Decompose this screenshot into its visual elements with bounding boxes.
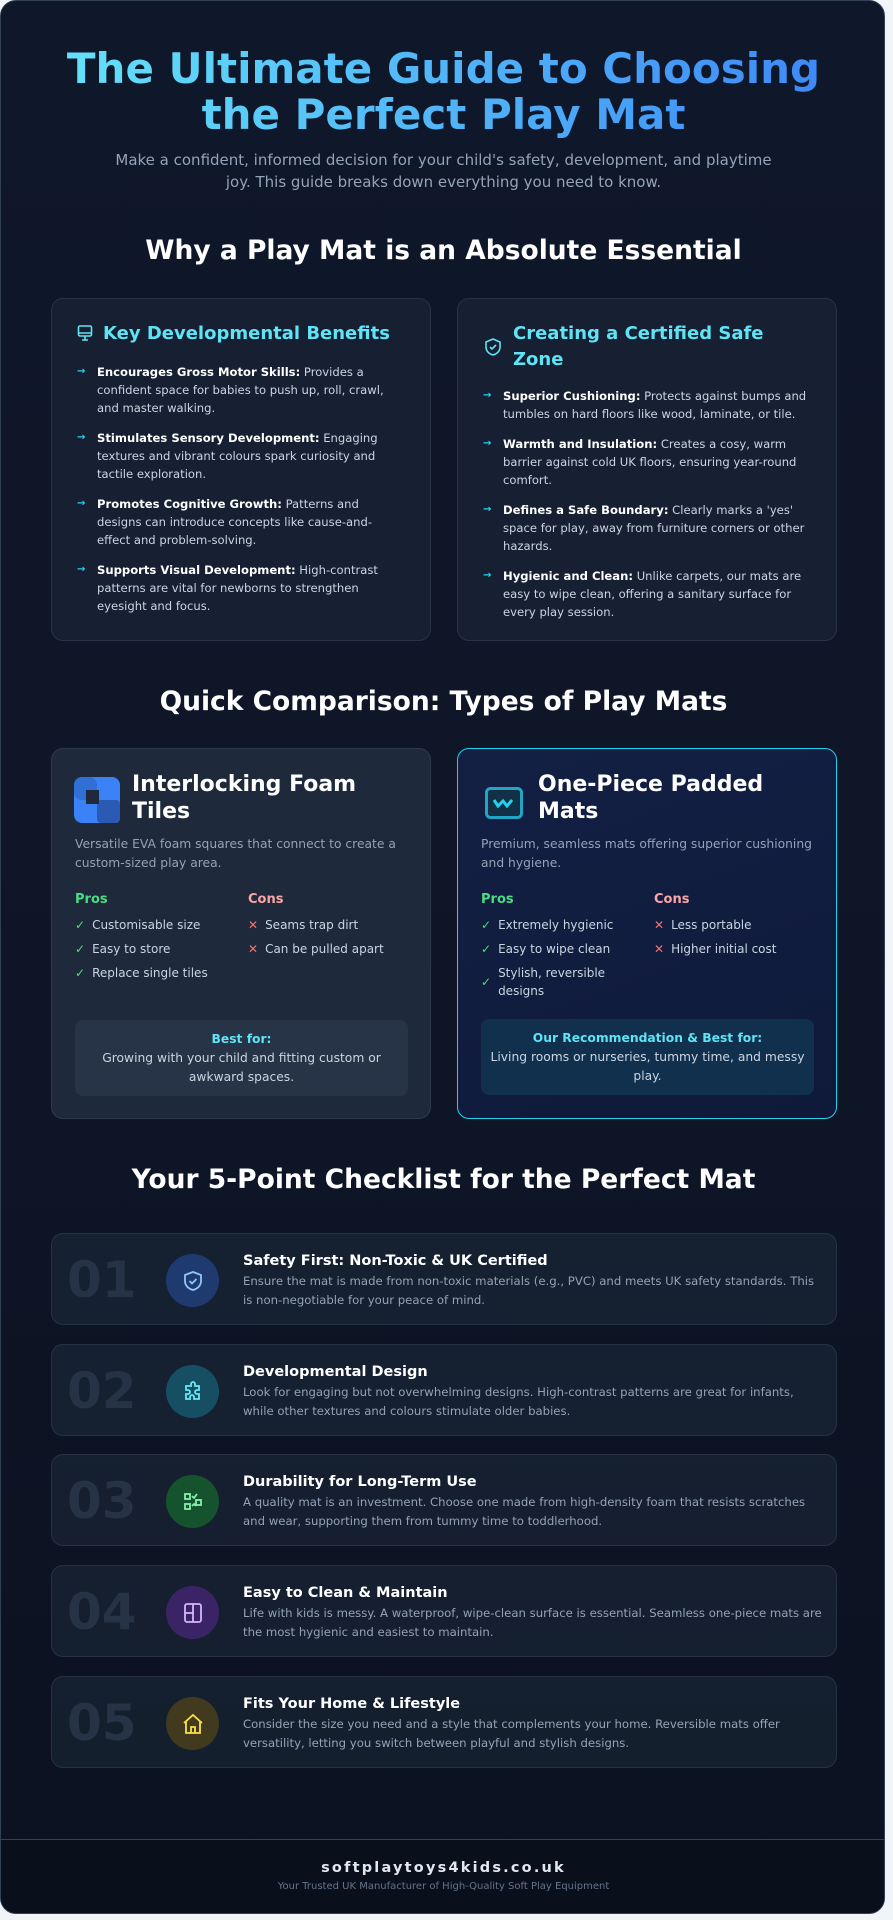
pros: Replace single tiles (92, 966, 208, 980)
description: Versatile EVA foam squares that connect to create a custom-sized play area. (75, 837, 396, 870)
pros: ✓ (75, 942, 85, 956)
pros: Pros (481, 892, 514, 907)
checklist item 4 (51, 1565, 837, 1657)
best for box: Growing with your child and fitting custom or awkward spaces. (102, 1051, 381, 1084)
cons (654, 892, 776, 956)
icon: blocks (166, 1586, 219, 1639)
checklist item 2: Look for engaging but not overwhelming designs. High-contrast patterns are great for infants, while other textures and colours stimulate older babies. (243, 1385, 794, 1418)
pros: Easy to store (92, 942, 170, 956)
panel: foam tiles (51, 748, 431, 1119)
title: the Perfect Play Mat (202, 90, 685, 139)
pros: Easy to wipe clean (498, 942, 610, 956)
benefit list: Promotes Cognitive Growth: Patterns and designs can introduce concepts like cause-and-effect and problem-solving. (97, 497, 372, 547)
checklist item 3: 03 (67, 1472, 137, 1530)
icon: checklist (166, 1475, 219, 1528)
cons: Can be pulled apart (265, 942, 384, 956)
safety list: Hygienic and Clean: Unlike carpets, our mats are easy to wipe clean, offering a sanitary surface for every play session. (503, 569, 801, 619)
panel: one-piece mats (457, 748, 837, 1119)
checklist item 3: A quality mat is an investment. Choose one made from high-density foam that resists scratches and wear, supporting them from tummy time to toddlerhood. (243, 1495, 805, 1528)
icon: padded mat (485, 787, 523, 819)
safety list: Defines a Safe Boundary: Clearly marks a 'yes' space for play, away from furniture corners or other hazards. (503, 503, 804, 553)
checklist item 2 (51, 1344, 837, 1436)
footer (1, 1839, 886, 1915)
checklist item 3: Durability for Long-Term Use (243, 1474, 477, 1490)
best for box (75, 1020, 408, 1096)
pros (75, 892, 208, 980)
pros: Pros (75, 892, 108, 907)
checklist item 1 (51, 1233, 837, 1325)
icon: puzzle (166, 1365, 219, 1418)
checklist item 2: 02 (67, 1362, 137, 1420)
cons: Less portable (671, 918, 752, 932)
card title: Tiles (132, 799, 190, 824)
title: The Ultimate Guide to Choosing (67, 44, 820, 93)
icon: shield (166, 1254, 219, 1307)
pros: ✓ (75, 966, 85, 980)
description: Premium, seamless mats offering superior cushioning and hygiene. (481, 837, 812, 870)
recommendation box (481, 1019, 814, 1095)
panel heading: Key Developmental Benefits (103, 323, 390, 344)
checklist item 5: Fits Your Home & Lifestyle (243, 1696, 460, 1712)
title (1, 46, 886, 138)
checklist item 5: Consider the size you need and a style that complements your home. Reversible mats offer versatility, letting you switch between playful and stylish designs. (243, 1717, 780, 1750)
checklist item 1: Ensure the mat is made from non-toxic materials (e.g., PVC) and meets UK safety standards. This is non-negotiable for your peace of mind. (243, 1274, 814, 1307)
card title (132, 772, 356, 824)
panel: developmental benefits (51, 298, 431, 641)
card title: Mats (538, 799, 598, 824)
panel: safe zone (457, 298, 837, 641)
cons: Cons (248, 892, 283, 907)
cons (248, 892, 384, 956)
icon: foam tiles (74, 777, 120, 823)
checklist item 4: Easy to Clean & Maintain (243, 1585, 448, 1601)
benefit list: Stimulates Sensory Development: Engaging textures and vibrant colours spark curiosity and tactile exploration. (97, 431, 378, 481)
heading: checklist: Your 5-Point Checklist for the Perfect Mat (132, 1164, 755, 1195)
pros: ✓ (481, 918, 491, 932)
cons: Seams trap dirt (265, 918, 358, 932)
panel heading: Creating a Certified Safe Zone (513, 323, 764, 370)
footer: Your Trusted UK Manufacturer of High-Quality Soft Play Equipment (278, 1881, 609, 1892)
checklist item 5: 05 (67, 1694, 137, 1752)
pros (481, 892, 613, 998)
recommendation box: Living rooms or nurseries, tummy time, and messy play. (490, 1050, 804, 1083)
card title: Interlocking Foam (132, 772, 356, 797)
pros: Stylish, reversible designs (498, 966, 605, 998)
recommendation box: Our Recommendation & Best for: (533, 1031, 762, 1045)
checklist item 2: Developmental Design (243, 1364, 428, 1380)
safety list (484, 389, 806, 619)
heading: why essential: Why a Play Mat is an Absolute Essential (145, 235, 742, 266)
benefit list (78, 365, 384, 613)
card title (538, 772, 763, 824)
pros: ✓ (481, 975, 491, 989)
checklist item 4: 04 (67, 1583, 137, 1641)
pros: Customisable size (92, 918, 200, 932)
pros: Extremely hygienic (498, 918, 613, 932)
cons: ✕ (654, 918, 664, 932)
benefit list: Encourages Gross Motor Skills: Provides a confident space for babies to push up, roll, crawl, and master walking. (97, 365, 384, 415)
cons: Higher initial cost (671, 942, 776, 956)
icon: house (166, 1697, 219, 1750)
checklist item 1: Safety First: Non-Toxic & UK Certified (243, 1253, 548, 1269)
pros: ✓ (75, 918, 85, 932)
checklist item 5 (51, 1676, 837, 1768)
cons: ✕ (654, 942, 664, 956)
card title: One-Piece Padded (538, 772, 763, 797)
safety list: Warmth and Insulation: Creates a cosy, warm barrier against cold UK floors, ensuring year-round comfort. (503, 437, 796, 487)
safety list: Superior Cushioning: Protects against bumps and tumbles on hard floors like wood, laminate, or tile. (503, 389, 806, 421)
cons: ✕ (248, 918, 258, 932)
cons: ✕ (248, 942, 258, 956)
heading: comparison: Quick Comparison: Types of Play Mats (160, 686, 727, 717)
checklist item 4: Life with kids is messy. A waterproof, wipe-clean surface is essential. Seamless one-piece mats are the most hygienic and easiest to maintain. (243, 1606, 822, 1639)
pros: ✓ (481, 942, 491, 956)
cons: Cons (654, 892, 689, 907)
best for box: Best for: (212, 1032, 271, 1046)
subtitle: Make a confident, informed decision for your child's safety, development, and playtime joy. This guide breaks down everything you need to know. (115, 151, 772, 191)
footer: softplaytoys4kids.co.uk (321, 1860, 566, 1876)
benefit list: Supports Visual Development: High-contrast patterns are vital for newborns to strengthen eyesight and focus. (97, 563, 378, 613)
checklist item 3 (51, 1454, 837, 1546)
checklist item 1: 01 (67, 1251, 137, 1309)
